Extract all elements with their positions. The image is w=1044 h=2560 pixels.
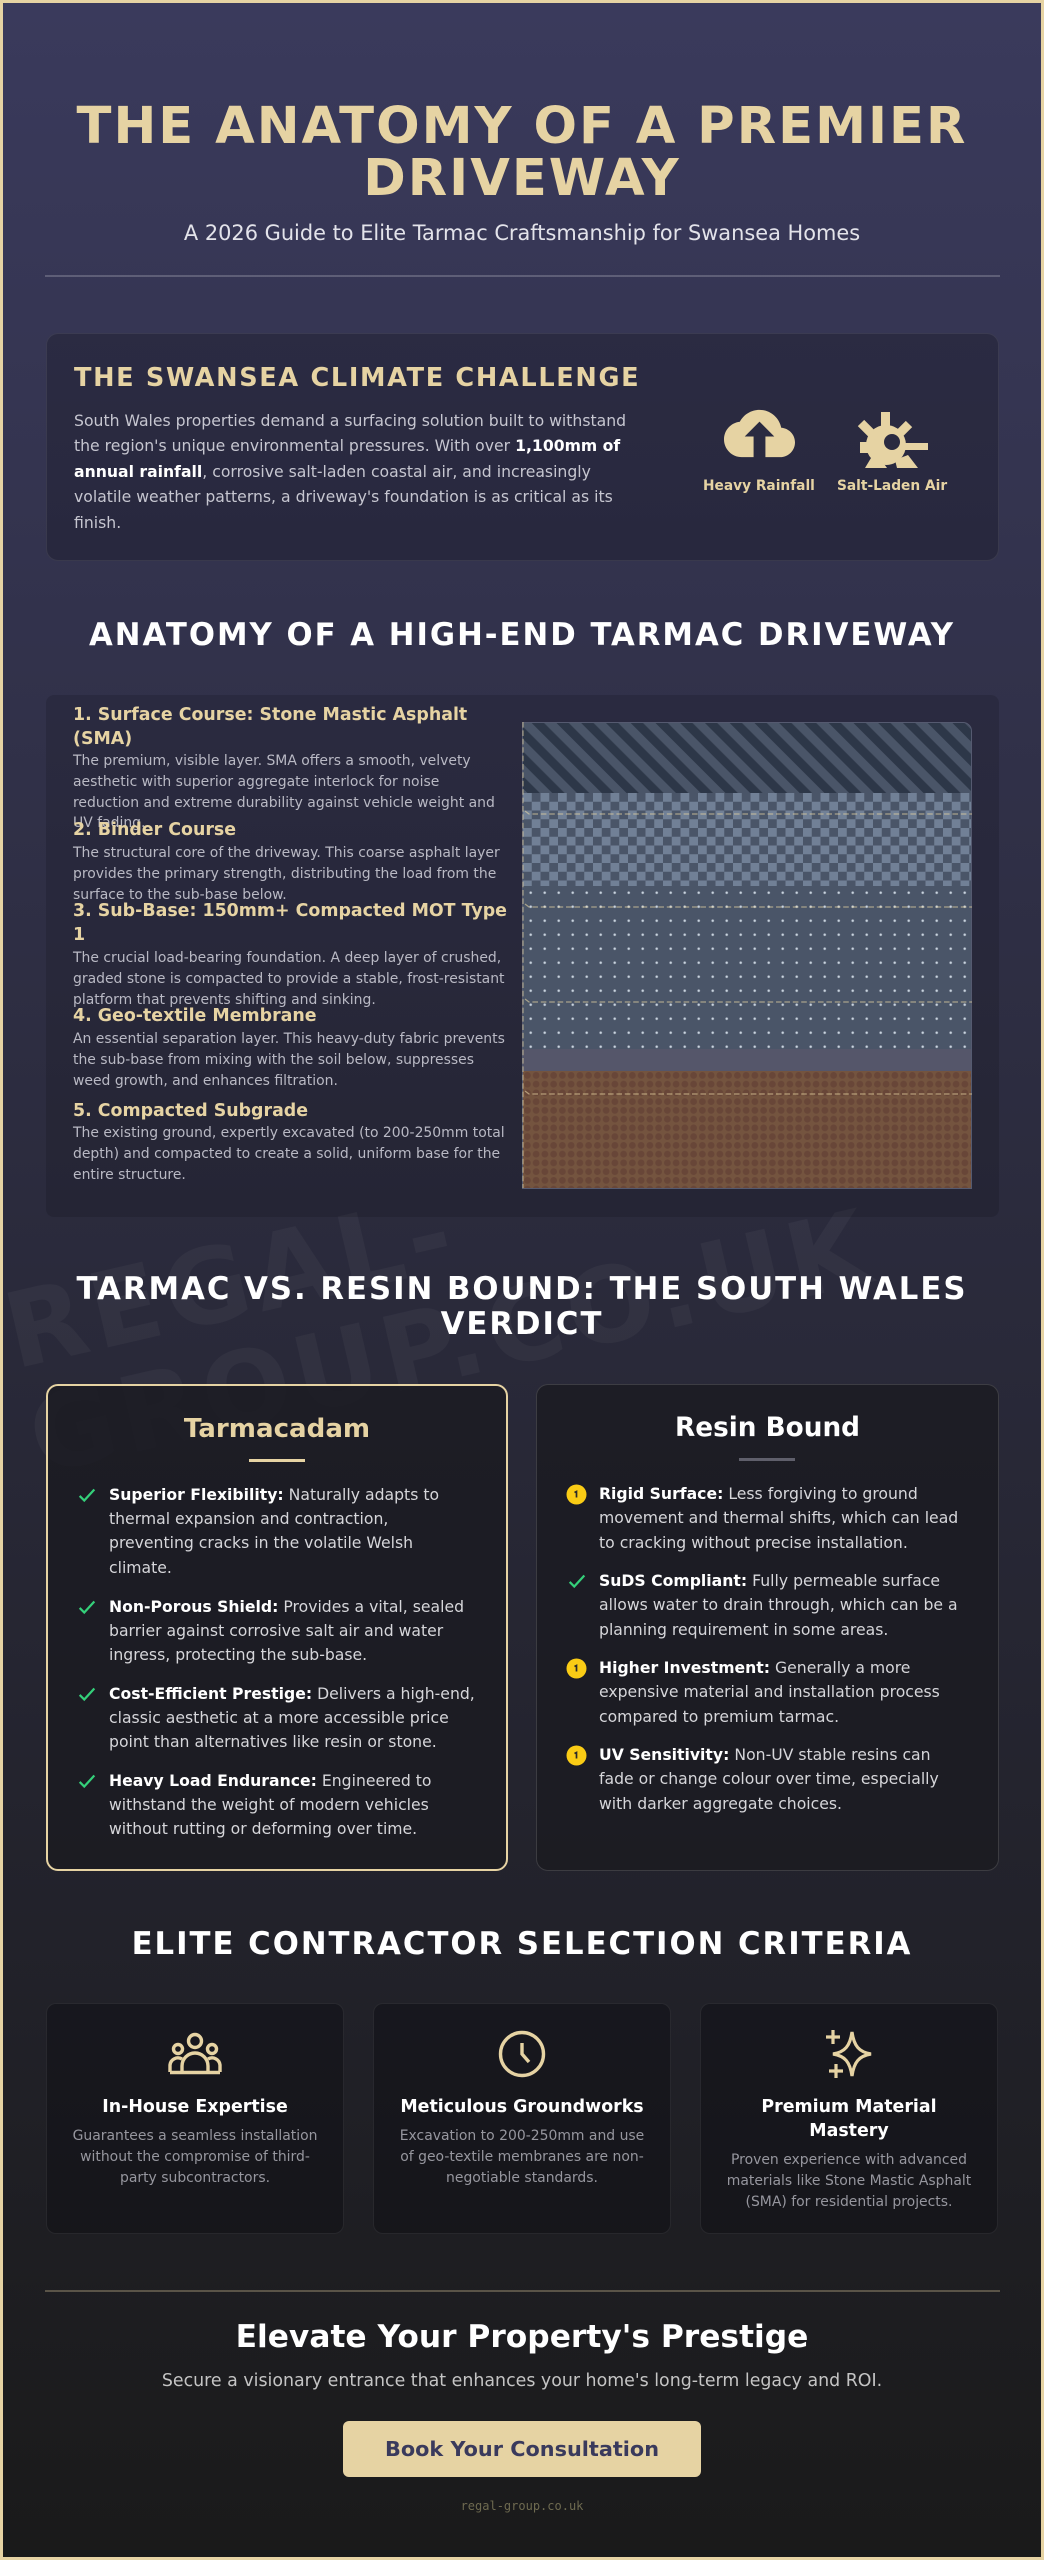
card text: of geo-textile membranes are non-	[400, 2149, 644, 2165]
layer 2 text	[72, 820, 500, 903]
text: 5. Compacted Subgrade	[73, 1100, 308, 1120]
heading: comparison: VERDICT	[441, 1306, 603, 1342]
text: weed growth, and enhances filtration.	[73, 1073, 338, 1089]
resin point 2: allows water to drain through, which can be a	[599, 1595, 958, 1614]
icon: warning 1	[566, 1484, 586, 1504]
heading: comparison	[76, 1271, 967, 1342]
tarmacadam point 2: ingress, protecting the sub-base.	[109, 1645, 367, 1664]
card text: Proven experience with advanced	[731, 2152, 967, 2168]
icon: check	[569, 1574, 586, 1588]
panel: tarmacadam	[46, 1384, 508, 1871]
text: 3. Sub-Base: 150mm+ Compacted MOT Type	[73, 901, 507, 921]
text: graded stone is compacted to provide a stable, frost-resistant	[73, 971, 505, 987]
tarmacadam point 3: Cost-Efficient Prestige: Delivers a high-end,	[109, 1684, 475, 1702]
resin accent	[739, 1458, 795, 1461]
icon: team	[168, 2032, 222, 2074]
icon: check 2	[79, 1600, 96, 1614]
layer 3 text	[72, 901, 507, 1008]
tarmacadam point 4	[109, 1770, 432, 1838]
icon: salt-laden air	[858, 412, 928, 468]
footer text: Secure a visionary entrance that enhances your home's long-term legacy and ROI.	[162, 2371, 882, 2391]
tarmacadam point 4: without rutting or deforming over time.	[109, 1819, 417, 1838]
layer 4 text	[73, 1006, 505, 1089]
card title: Premium Material	[761, 2097, 937, 2117]
tarmacadam point 1: Superior Flexibility: Naturally adapts to	[109, 1484, 439, 1504]
text: reduction and extreme durability against vehicle weight and	[73, 795, 495, 811]
tarmacadam point 2: Non-Porous Shield: Provides a vital, sealed	[109, 1596, 464, 1616]
footer heading: Elevate Your Property's Prestige	[236, 2319, 808, 2355]
watermark: REGAL-	[0, 1171, 469, 1393]
heading: anatomy: ANATOMY OF A HIGH-END TARMAC DRIVEWAY	[89, 617, 955, 653]
resin point 4: with darker aggregate choices.	[599, 1794, 842, 1813]
card text: party subcontractors.	[120, 2170, 270, 2186]
layer: binder course	[523, 793, 971, 886]
button	[343, 2421, 701, 2477]
resin point 3: Higher Investment: Generally a more	[599, 1658, 910, 1677]
resin point 4: UV Sensitivity: Non-UV stable resins can	[599, 1745, 931, 1764]
resin point 1: Rigid Surface: Less forgiving to ground	[599, 1484, 918, 1503]
text: The crucial load-bearing foundation. A deep layer of crushed,	[73, 950, 501, 966]
resin point 2: SuDS Compliant: Fully permeable surface	[599, 1571, 940, 1590]
tarmacadam point 2: barrier against corrosive salt air and water	[109, 1621, 443, 1640]
label: heavy rainfall: Heavy Rainfall	[703, 478, 815, 494]
icon: warning 2	[566, 1658, 586, 1678]
heading: comparison: TARMAC VS. RESIN BOUND: THE SOUTH WALES	[77, 1271, 967, 1307]
icon: heavy rainfall	[724, 410, 795, 458]
title	[76, 96, 967, 208]
text: The premium, visible layer. SMA offers a smooth, velvety	[73, 753, 471, 769]
text: The existing ground, expertly excavated (to 200-250mm total	[73, 1125, 505, 1141]
tarmacadam point 3: point than alternatives like resin or stone.	[109, 1732, 437, 1751]
panel: anatomy	[46, 695, 999, 1217]
resin point 3: expensive material and installation process	[599, 1682, 940, 1701]
layer 1 text	[72, 705, 495, 831]
resin point 1: to cracking without precise installation.	[599, 1533, 908, 1552]
layer: surface course	[523, 723, 971, 793]
subtitle: A 2026 Guide to Elite Tarmac Craftsmanship for Swansea Homes	[184, 221, 860, 245]
resin point 4	[599, 1745, 939, 1813]
tarmacadam point 3	[109, 1684, 475, 1751]
text: 1	[73, 925, 85, 945]
layer: sub-base	[523, 886, 971, 1049]
icon: warning 3	[566, 1746, 586, 1766]
card title: In-House Expertise	[102, 2097, 288, 2117]
resin point 2: planning requirement in some areas.	[599, 1620, 888, 1639]
tarmacadam point 1: thermal expansion and contraction,	[109, 1509, 388, 1528]
resin point 1: movement and thermal shifts, which can lead	[599, 1508, 958, 1527]
tarmacadam accent	[249, 1459, 305, 1462]
layer: geo-textile	[523, 1049, 971, 1071]
leader lines	[523, 722, 972, 1188]
card text: Excavation to 200-250mm and use	[400, 2128, 644, 2144]
resin point 3: compared to premium tarmac.	[599, 1707, 839, 1726]
resin point 1	[599, 1484, 958, 1552]
text: platform that prevents shifting and sinking.	[73, 992, 376, 1008]
card title	[761, 2097, 937, 2141]
text: (SMA)	[73, 729, 132, 749]
text: entire structure.	[73, 1167, 186, 1183]
tarmacadam point 3: classic aesthetic at a more accessible price	[109, 1708, 449, 1727]
card title: Meticulous Groundworks	[400, 2097, 644, 2117]
climate heading: THE SWANSEA CLIMATE CHALLENGE	[74, 363, 640, 393]
heading: criteria: ELITE CONTRACTOR SELECTION CRITERIA	[132, 1926, 912, 1962]
icon: check 4	[79, 1774, 96, 1788]
text: aesthetic with superior aggregate interlock for noise	[73, 774, 439, 790]
card: premium material	[700, 2003, 998, 2234]
card text: negotiable standards.	[446, 2170, 598, 2186]
text: the sub-base from mixing with the soil below, suppresses	[73, 1052, 474, 1068]
website: regal-group.co.uk	[461, 2499, 583, 2513]
panel: climate challenge	[46, 333, 999, 561]
card text: Guarantees a seamless installation	[73, 2128, 317, 2144]
icon: sparkle	[826, 2030, 872, 2078]
icon: check 3	[79, 1688, 96, 1702]
card text: without the compromise of third-	[80, 2149, 310, 2165]
watermark: GROUP.CO.UK	[18, 1185, 885, 1498]
panel: resin bound	[536, 1384, 999, 1871]
text: 1. Surface Course: Stone Mastic Asphalt	[73, 705, 467, 725]
resin point 3	[599, 1658, 940, 1726]
title: THE ANATOMY OF A PREMIER	[77, 96, 967, 156]
card text	[727, 2152, 971, 2210]
climate body text	[74, 410, 626, 532]
tarmacadam point 4: Heavy Load Endurance: Engineered to	[109, 1770, 432, 1790]
resin point 4: fade or change colour over time, especially	[599, 1769, 939, 1788]
layer 5 text	[72, 1100, 505, 1183]
tarmacadam point 4: withstand the weight of modern vehicles	[109, 1795, 429, 1814]
resin heading: Resin Bound	[675, 1413, 860, 1443]
text: 2. Binder Course	[73, 820, 236, 840]
text: provides the primary strength, distributing the load from the	[73, 866, 496, 882]
card text: materials like Stone Mastic Asphalt	[727, 2173, 971, 2189]
card: groundworks	[373, 2003, 671, 2234]
climate body text: finish.	[74, 512, 121, 532]
diagram: driveway cross-section	[522, 722, 972, 1189]
card: in-house expertise	[46, 2003, 344, 2234]
title: DRIVEWAY	[363, 148, 681, 208]
tarmacadam heading: Tarmacadam	[184, 1414, 370, 1444]
button: Book Your Consultation	[385, 2437, 659, 2461]
card text	[73, 2128, 317, 2186]
card text	[400, 2128, 644, 2186]
text: surface to the sub-base below.	[73, 887, 287, 903]
icon: clock	[498, 2030, 546, 2078]
label: salt-laden air: Salt-Laden Air	[837, 478, 947, 494]
text: The structural core of the driveway. This coarse asphalt layer	[73, 845, 500, 861]
layer: subgrade	[523, 1071, 971, 1188]
climate body text: the region's unique environmental pressures. With over 1,100mm of	[74, 436, 620, 455]
tarmacadam point 1: preventing cracks in the volatile Welsh	[109, 1533, 413, 1552]
tarmacadam point 1	[109, 1484, 439, 1577]
tarmacadam point 1: climate.	[109, 1558, 172, 1577]
climate body text: annual rainfall, corrosive salt-laden coastal air, and increasingly	[74, 462, 591, 480]
resin point 2	[599, 1571, 958, 1639]
climate body text: volatile weather patterns, a driveway's foundation is as critical as its	[74, 487, 613, 506]
card text: (SMA) for residential projects.	[746, 2194, 952, 2210]
tarmacadam point 2	[109, 1596, 464, 1664]
climate body text: South Wales properties demand a surfacing solution built to withstand	[74, 410, 626, 430]
card title: Mastery	[809, 2121, 889, 2141]
text: 4. Geo-textile Membrane	[73, 1006, 317, 1026]
text: depth) and compacted to create a solid, uniform base for the	[73, 1146, 500, 1162]
icon: check 1	[79, 1488, 96, 1502]
text: An essential separation layer. This heavy-duty fabric prevents	[73, 1031, 505, 1047]
text: UV fading.	[73, 815, 145, 831]
